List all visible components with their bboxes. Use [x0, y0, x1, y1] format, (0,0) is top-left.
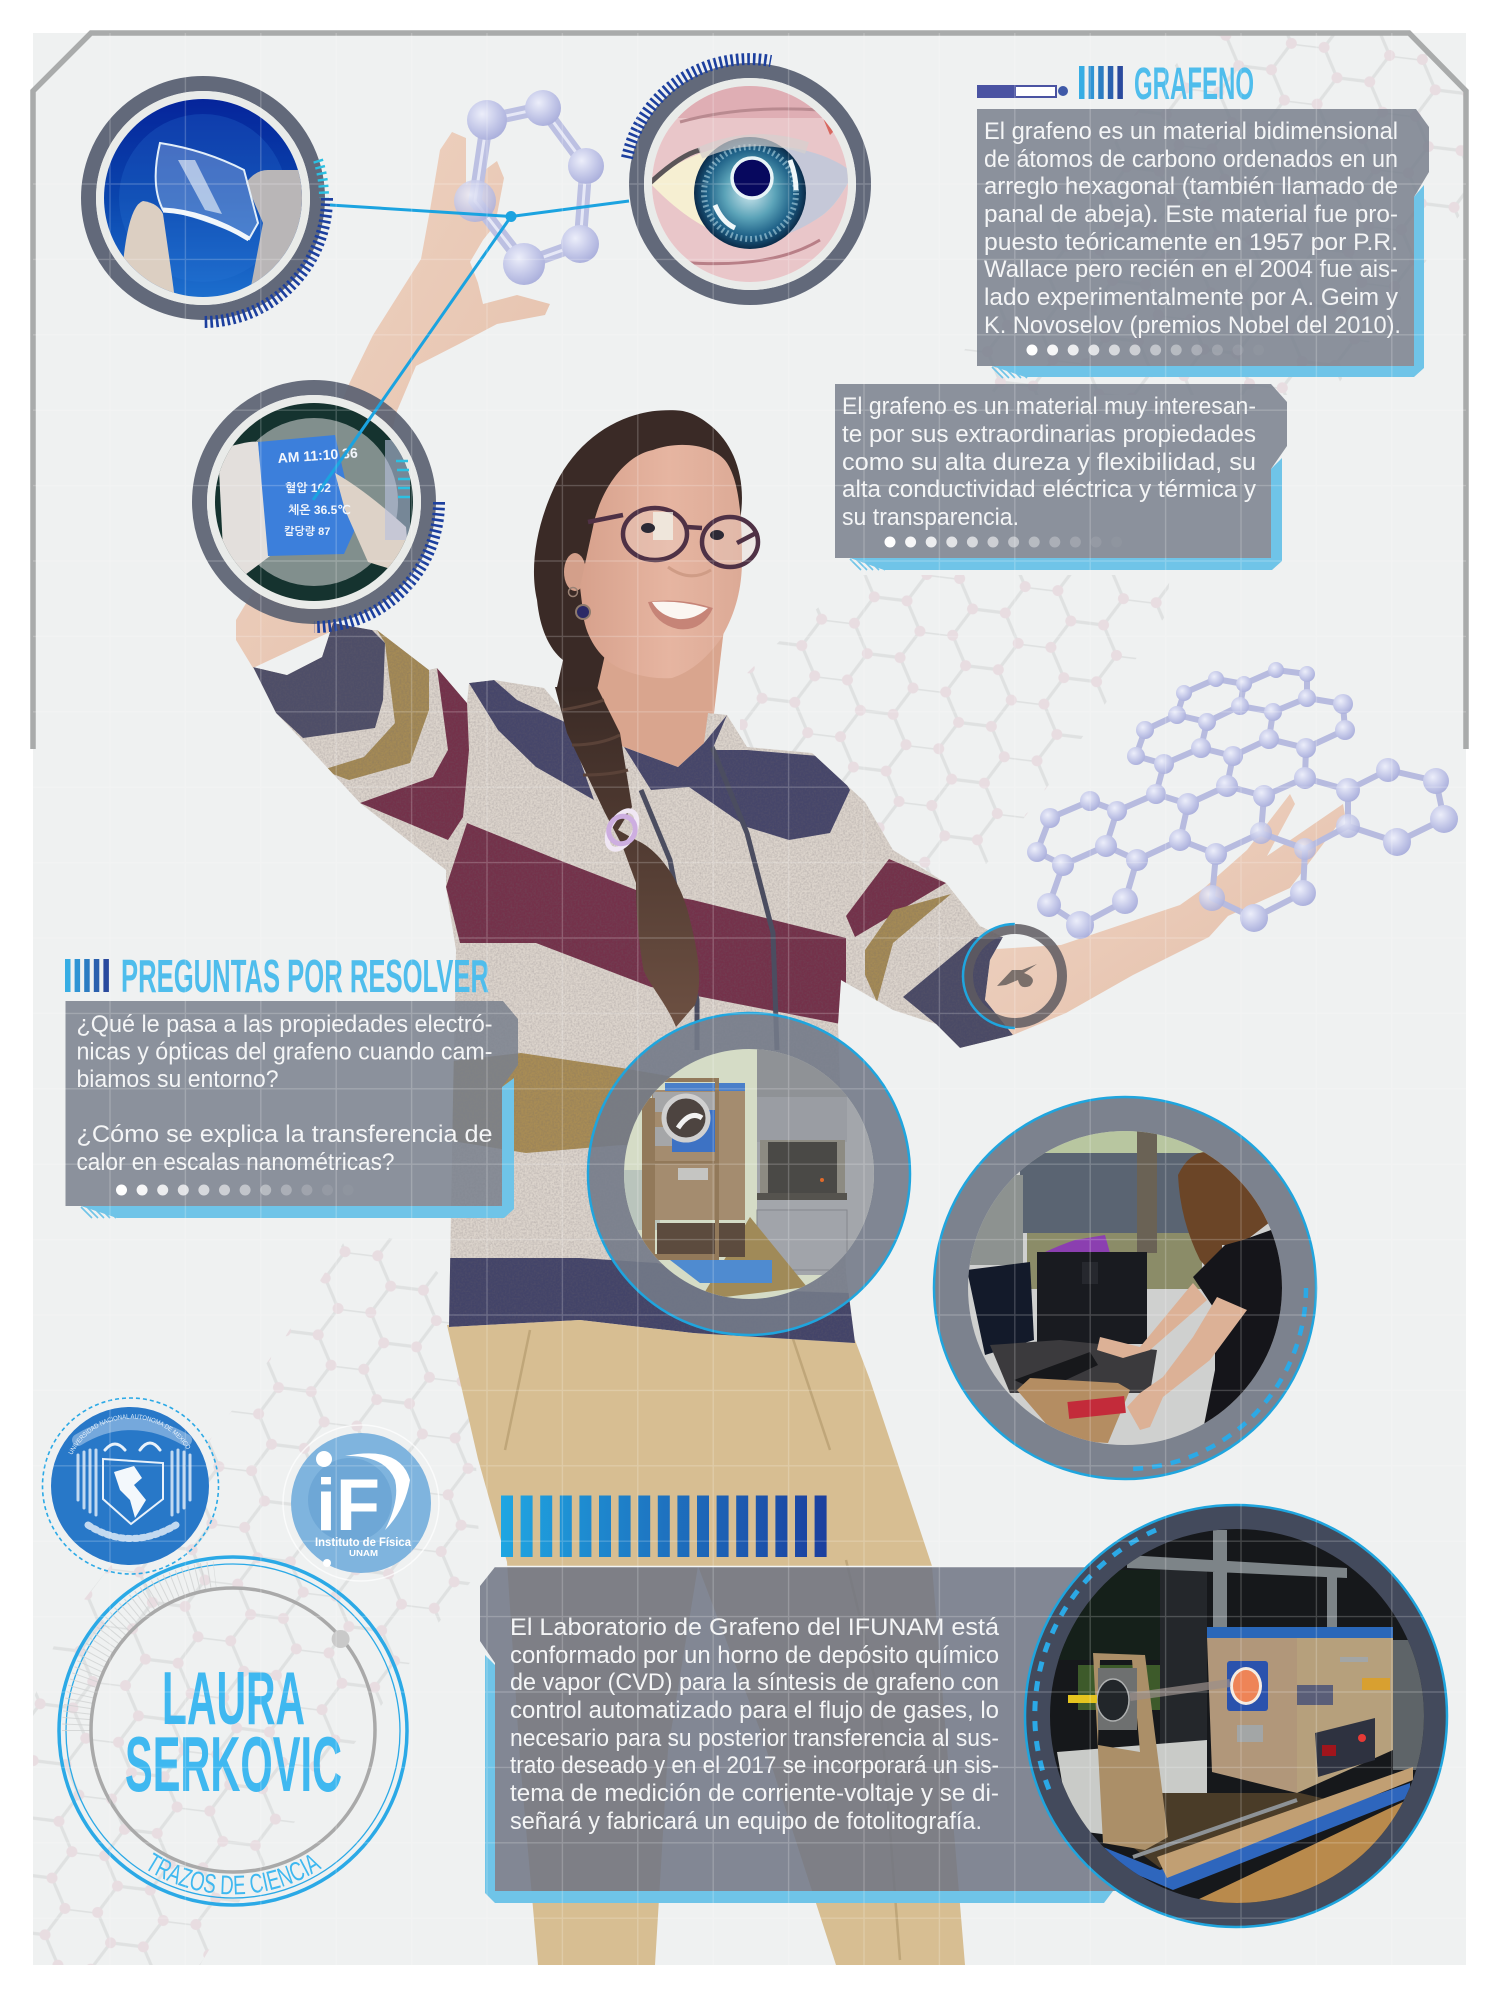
raised left arm and hand [236, 132, 550, 668]
neck [575, 620, 725, 780]
crest drawing [78, 1424, 190, 1538]
panel text [510, 1614, 1000, 1835]
panel text: tema de medición de corriente-voltaje y se di- [510, 1780, 999, 1807]
panel text: El Laboratorio de Grafeno del IFUNAM está [510, 1614, 1000, 1641]
garden and lawn [1058, 1570, 1120, 1660]
panel text: de átomos de carbono ordenados en un [984, 146, 1398, 173]
circle ticks [203, 198, 327, 322]
panel text: calor en escalas nanométricas? [76, 1149, 394, 1176]
crest motto: UNIVERSIDAD NACIONAL AUTONOMA DE MEXICO [68, 1414, 190, 1454]
furnace front face [1207, 1637, 1297, 1793]
panel text: ¿Cómo se explica la transferencia de [76, 1121, 493, 1148]
nose [668, 567, 711, 576]
panel text: puesto teóricamente en 1957 por P.R. [984, 229, 1398, 256]
panel text: nicas y ópticas del grafeno cuando cam- [76, 1038, 492, 1066]
machine blue base [670, 1260, 772, 1283]
circle rings [636, 70, 864, 298]
researcher hair [1178, 1152, 1268, 1266]
circle ring [934, 1097, 1316, 1479]
heading text: PREGUNTAS POR RESOLVER [121, 950, 489, 1002]
logo i dot [316, 1451, 332, 1467]
chamfered top frame [33, 33, 1466, 749]
hexagon lattice background: middle [740, 575, 1169, 874]
knit texture [250, 620, 1020, 1350]
panel text: control automatizado para el flujo de gases, lo [510, 1697, 999, 1724]
panel top border [495, 1566, 1140, 1568]
tube stand [1093, 1653, 1168, 1850]
hair [534, 410, 742, 690]
stamp hatch [76, 1575, 215, 1731]
blue base rail [1103, 1783, 1410, 1890]
right sleeve maroon [846, 859, 946, 937]
panel body [480, 1567, 1140, 1891]
panel text [76, 1011, 493, 1176]
panel text: arreglo hexagonal (también llamado de [984, 173, 1398, 200]
stamp marker [332, 1630, 350, 1648]
name first line: LAURA [162, 1656, 305, 1740]
circle photo: 체온 36.5℃ [288, 503, 351, 517]
maroon stripe [446, 823, 846, 1025]
researcher shirt [1193, 1230, 1282, 1424]
lens reflection [653, 512, 673, 540]
right sleeve gold [865, 894, 951, 1002]
panel text: conformado por un horno de depósito químico [510, 1642, 999, 1669]
stamp caption: TRAZOS DE CIENCIA [148, 1852, 322, 1894]
stamp inner ring [91, 1588, 375, 1872]
panel text: K. Novoselov (premios Nobel del 2010). [984, 312, 1401, 339]
dashed arc [1125, 1288, 1306, 1469]
circle ring [588, 1013, 910, 1335]
panel blue backing [850, 458, 1282, 570]
panel text: panal de abeja). Este material fue pro- [984, 201, 1398, 228]
hood strings [641, 747, 777, 1050]
furnace labels [1297, 1685, 1333, 1705]
panel blue backing [485, 1655, 1113, 1903]
panel body [66, 1001, 518, 1206]
eyes [641, 523, 724, 540]
braid [555, 687, 699, 1027]
panel text: ¿Qué le pasa a las propiedades electró- [76, 1011, 492, 1038]
circle: eye [627, 59, 864, 297]
panel text: lado experimentalmente por A. Geim y [984, 284, 1398, 311]
person: scientist holding graphene [236, 132, 1345, 1965]
panel blue backing [992, 185, 1424, 377]
circle rings [88, 84, 318, 312]
circle: CVD furnace front view [588, 1013, 910, 1335]
panel text: trato deseado y en el 2017 se incorporará un sis- [510, 1752, 999, 1779]
elbow ring [963, 924, 1062, 1028]
circle photo: 칼당량 87 [284, 525, 330, 538]
hood and chest navy stripe [624, 715, 850, 840]
logo: UNAM crest [42, 1397, 220, 1575]
circle: researcher at workstation [934, 1097, 1316, 1479]
circle ring [1025, 1505, 1447, 1927]
face [580, 445, 742, 678]
hexagon lattice background: top right [950, 33, 1466, 398]
window frames [1127, 1530, 1347, 1627]
earring [568, 588, 590, 619]
logo caption: UNAM [349, 1548, 378, 1558]
logo: Instituto de Física [283, 1425, 439, 1581]
machine frame [642, 1078, 719, 1265]
panel: what is graphene [977, 109, 1429, 378]
heading bars [65, 959, 109, 992]
stamp curved caption path [144, 1868, 322, 1894]
heading widget [978, 86, 1068, 97]
furnace window [1227, 1661, 1268, 1711]
sill and wall [1057, 1740, 1207, 1835]
researcher arms [1097, 1283, 1247, 1430]
smile [648, 600, 713, 629]
logo letters: iF [316, 1465, 380, 1546]
hexagon lattice background: lower left [33, 1230, 483, 1965]
circle photo [1050, 1528, 1428, 1906]
panel text: necesario para su posterior transferencia al sus- [510, 1725, 999, 1752]
control panel [1315, 1718, 1375, 1777]
panel: graphene laboratory [480, 1566, 1140, 1903]
quartz tube [1130, 1683, 1230, 1697]
connector lines from molecule to circles [313, 201, 629, 500]
right cuff [903, 937, 1013, 1048]
dashed ring [42, 1398, 218, 1574]
panel body [835, 384, 1287, 558]
machine body [652, 1090, 745, 1220]
panel text: señará y fabricará un equipo de fotolitografía. [510, 1808, 982, 1835]
hem navy stripe [449, 1258, 860, 1350]
barcode bars above lab panel [501, 1496, 827, 1557]
sleeve gold stripe [322, 630, 429, 780]
logo disc [291, 1433, 431, 1573]
circle rings [200, 388, 428, 616]
circle photo [965, 1128, 1285, 1448]
graphene heading [978, 58, 1254, 109]
dashed arc [1035, 1530, 1156, 1792]
panel dots [116, 1184, 354, 1196]
scrunchie [600, 805, 644, 855]
panel text: alta conductividad eléctrica y térmica y [842, 476, 1256, 503]
panel text [842, 393, 1256, 531]
ear [564, 553, 586, 591]
outer faint ring [283, 1425, 439, 1581]
right arm and hand [980, 794, 1345, 1035]
panel: properties [835, 384, 1287, 570]
circle: flexible graphene sheet [88, 84, 327, 322]
lab bench [700, 1217, 807, 1300]
small molecule held in raised hand [454, 90, 604, 285]
panel text: de vapor (CVD) para la síntesis de grafeno con [510, 1669, 999, 1696]
circle photo [650, 84, 853, 284]
sleeve maroon stripe [360, 668, 469, 840]
panel hatch [992, 367, 1027, 378]
panel hatch [81, 1207, 116, 1218]
panel: open questions [66, 1001, 518, 1218]
heading bars [1079, 66, 1123, 99]
logo caption: Instituto de Física [315, 1535, 411, 1549]
panel blue backing [81, 1078, 514, 1218]
panel text: su transparencia. [842, 504, 1019, 531]
pants [447, 1312, 965, 1965]
panel text [984, 118, 1401, 339]
panel text: Wallace pero recién en el 2004 fue ais- [984, 256, 1398, 283]
shoulder navy stripe [469, 680, 594, 800]
sleeve navy cuff [253, 623, 385, 738]
circle ticks [627, 59, 771, 158]
circle photo: 혈압 102 [285, 481, 331, 495]
sweater [250, 620, 1020, 1350]
circle photo [100, 95, 306, 301]
panel hatch [850, 559, 885, 570]
logo disc [51, 1407, 209, 1565]
glasses [588, 508, 758, 567]
questions heading [65, 950, 489, 1002]
panel dots [1026, 344, 1264, 356]
panel text: El grafeno es un material bidimensional [984, 118, 1398, 145]
circle: flexible wristband display [200, 388, 439, 627]
circle photo [620, 1045, 882, 1305]
tan rail cover [1157, 1767, 1413, 1878]
tattoo [997, 964, 1037, 987]
furnace side face [1297, 1637, 1393, 1793]
gold stripe [452, 1053, 670, 1153]
panel text: como su alta dureza y flexibilidad, su [842, 449, 1256, 476]
furnace nameplate and handle [1237, 1657, 1368, 1742]
name second line: SERKOVIC [125, 1720, 342, 1808]
circle photo [214, 402, 414, 602]
heading text: GRAFENO [1134, 58, 1254, 109]
circle photo: AM 11:10 36 [277, 444, 358, 466]
name stamp [57, 1555, 409, 1907]
furnace top [1207, 1627, 1393, 1638]
graphene sheet molecule over right hand [1027, 662, 1458, 939]
panel body [977, 109, 1429, 366]
panel dots [884, 536, 1122, 548]
panel text: biamos su entorno? [76, 1066, 278, 1093]
circle ticks [314, 502, 439, 627]
circle: CVD furnace side view [1025, 1505, 1447, 1927]
logo swoosh [345, 1453, 410, 1530]
wood floor [1199, 1802, 1404, 1903]
stamp outer rings [59, 1557, 407, 1905]
crest motto arc [72, 1419, 190, 1455]
crest map [114, 1466, 146, 1518]
panel text: El grafeno es un material muy interesan- [842, 393, 1256, 420]
panel text: te por sus extraordinarias propiedades [842, 421, 1256, 448]
pants pocket seams [505, 1330, 900, 1960]
